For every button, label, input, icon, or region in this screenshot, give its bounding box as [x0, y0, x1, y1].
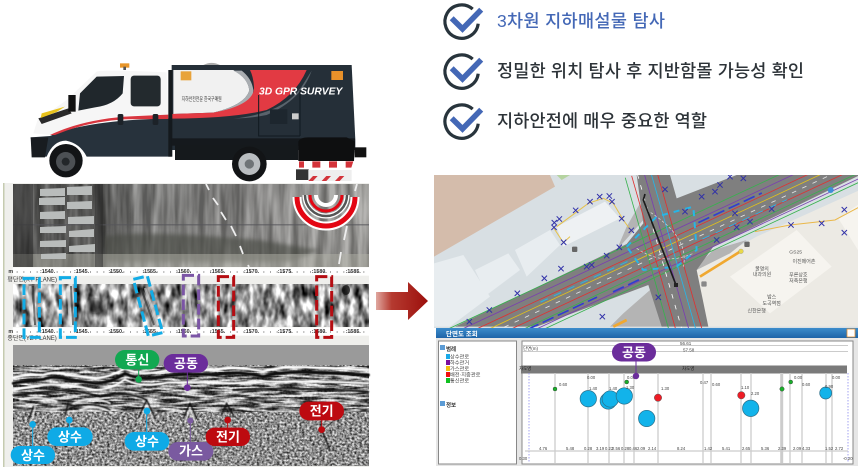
ruler: strip scale: :1580. [312, 329, 327, 335]
heading: precise location survey: 정밀한 위치 탐사 후 지반함몰 가능성 확인 [497, 61, 804, 81]
depth labels: 2.20 [751, 391, 760, 396]
depth labels: 0.47 [700, 380, 709, 385]
depth labels: 5.41 [722, 446, 731, 451]
ruler: strip scale: :1540. [40, 329, 56, 335]
ruler: strip scale: :1560. [176, 329, 192, 335]
depth labels: 0.00 [587, 375, 596, 380]
map POI labels: 저축은행 [789, 278, 808, 285]
panel: road surface image [13, 184, 369, 267]
heading: safety role: 지하안전에 매우 중요한 역할 [497, 111, 707, 131]
depth labels: 2.09 [637, 446, 646, 451]
callout: telecom [115, 350, 159, 383]
callout: telecom: 통신 [125, 352, 149, 367]
depth labels: 0.00 [794, 375, 803, 380]
callout: water pipe 1: 상수 [21, 448, 45, 463]
ruler: strip scale: :1575. [278, 329, 293, 335]
callout: water pipe 1 [11, 421, 55, 464]
callout: cavity on section: 공동 [622, 345, 646, 360]
depth labels: 2.65 [742, 446, 751, 451]
chart: GPR cross-section radargram [13, 345, 369, 466]
roads [610, 203, 747, 327]
survey section line [643, 194, 676, 285]
ruler: road image scale: :1550. [108, 269, 124, 275]
depth labels: 1.40 [609, 386, 618, 391]
utility lines along cross road [625, 169, 702, 338]
ruler: road image scale: :1575. [278, 269, 293, 275]
callout: water pipe 3: 상수 [135, 434, 159, 449]
depth labels: 0.60 [712, 382, 721, 387]
depth labels: 3.19 [596, 446, 605, 451]
ruler: road image scale: :1570. [244, 269, 260, 275]
callouts: radargram utility labels [11, 350, 344, 464]
pipe: water circles [580, 387, 832, 427]
map POI labels [747, 249, 816, 315]
depth labels: 5.36 [761, 446, 770, 451]
ruler: strip scale [7, 327, 369, 342]
panel: legend box: 배전·지중관로 [450, 370, 481, 378]
ruler: road image scale [7, 267, 369, 284]
ruler: road image scale: m [8, 269, 13, 275]
callout: electric 2 [299, 402, 344, 433]
map POI labels: 신한은행 [747, 308, 766, 315]
panel: legend box [438, 341, 516, 464]
depth labels: 4.33 [802, 446, 811, 451]
depth labels [519, 375, 853, 461]
depth labels: 2.39 [778, 446, 787, 451]
depth labels: 0.60 [802, 382, 811, 387]
depth labels: 2.56 [612, 446, 621, 451]
depth labels: 4.76 [539, 446, 548, 451]
callout: cavity [164, 354, 208, 391]
map POI labels: 푸른상호 [789, 271, 808, 278]
callout: gas: 가스 [179, 444, 203, 459]
annotations: dashed detection boxes [24, 275, 332, 337]
ruler: road image scale: :1555. [142, 269, 158, 275]
depth labels: 1.30 [626, 385, 635, 390]
depth labels: 0.22 [605, 446, 614, 451]
beige blocks [697, 190, 860, 327]
callout: cavity: 공동 [174, 356, 198, 371]
panel: legend box: 하수관거 [450, 358, 469, 366]
chart: pipe cross-section: 57.58 [683, 348, 695, 352]
ruler: road image scale: :1565. [210, 269, 226, 275]
window title bar [436, 328, 858, 338]
ruler: strip scale: :1550. [108, 329, 124, 335]
close button [847, 329, 855, 337]
ruler: strip scale: :1545. [74, 329, 90, 335]
depth labels: 0.00 [832, 375, 841, 380]
ruler: road image scale: 평단면(XY PLANE) [7, 276, 57, 284]
icon: check 3 [445, 105, 481, 138]
truck [31, 63, 366, 181]
depth labels: 0.90 [825, 384, 834, 389]
icon: radar half rings [297, 195, 355, 226]
depth labels: 2.09 [793, 446, 802, 451]
ruler: road image scale: :1585. [346, 269, 361, 275]
panel: utility map [434, 175, 858, 328]
depth labels: 0.28 [621, 446, 630, 451]
ruler: strip scale: :1570. [244, 329, 260, 335]
map POI labels: 밥스 [767, 294, 777, 301]
chart: pipe cross-section [519, 341, 853, 464]
map POI labels: 도곡역점 [762, 300, 781, 307]
pipe: telecom circles [553, 380, 793, 391]
panel: legend box: 범례 [446, 345, 456, 353]
ruler: strip scale: 종단면(YZ PLANE) [7, 334, 57, 342]
callout: water pipe 3 [125, 408, 169, 451]
depth labels: 5.48 [566, 446, 575, 451]
ruler: road image scale: :1560. [176, 269, 192, 275]
panel: legend box: 가스관로 [450, 364, 469, 372]
panel: legend box: 정보 [446, 401, 456, 409]
callout: electric 1: 전기 [216, 429, 240, 444]
pipe: electric circles [654, 392, 745, 401]
callout: cavity on section [612, 343, 656, 379]
panel: GPR left strip background [3, 183, 369, 467]
panel: legend box: 통신관로 [450, 376, 469, 384]
x markers [467, 174, 847, 324]
chart: pipe cross-section: 단면(m) [523, 345, 539, 351]
depth labels: 1.30 [661, 386, 670, 391]
ruler: strip scale: :1585. [346, 329, 361, 335]
depth labels: 0.30 [519, 456, 528, 461]
chart: pipe cross-section: 56.61 [680, 341, 692, 346]
ruler: strip scale: :1555. [142, 329, 158, 335]
map POI labels: 내과의원 [753, 271, 772, 278]
callout: water pipe 2: 상수 [58, 429, 82, 444]
callout: electric 1 [206, 417, 250, 446]
depth labels: 2.72 [835, 446, 844, 451]
ruler: road image scale: :1545. [74, 269, 90, 275]
depth labels: 0.28 [584, 446, 593, 451]
depth labels: 1.40 [589, 386, 598, 391]
chart: pipe cross-section: 차도영 [519, 365, 531, 372]
depth labels: 2.14 [648, 446, 657, 451]
ruler: strip scale: :1565. [210, 329, 226, 335]
ruler: strip scale: m [8, 329, 13, 335]
depth labels: 0.60 [559, 382, 568, 387]
panel: cross-section window [436, 328, 858, 466]
ruler: road image scale: :1580. [312, 269, 327, 275]
callout: water pipe 2 [47, 417, 93, 446]
depth labels: -0.20 [843, 456, 853, 461]
depth labels: 0.00 [627, 375, 636, 380]
chart: pipe cross-section: 차도영 [682, 365, 694, 372]
depth labels: 1.42 [704, 446, 713, 451]
ruler: road image scale: :1540. [40, 269, 56, 275]
depth labels: 1.10 [741, 385, 750, 390]
arrow: red block arrow [376, 282, 428, 320]
map POI labels: 이진메어촌 [793, 258, 816, 265]
callout: electric 2: 전기 [310, 403, 334, 418]
panel: legend box: 상수관로 [450, 352, 469, 360]
icon: check 2 [445, 55, 481, 88]
map POI labels: GS25 [789, 249, 802, 255]
depth labels: 0.46 [629, 446, 638, 451]
truck: 지하안전전문 한국구매원 [182, 95, 222, 103]
map POI labels: 꿀명의 [755, 265, 769, 272]
depth labels: 1.52 [825, 446, 834, 451]
window title: 단면도 조회 [446, 329, 478, 338]
utility lines along main road [450, 175, 858, 328]
heading: 3D underground survey: 3차원 지하매설물 탐사 [497, 11, 665, 31]
truck: 3D GPR SURVEY [259, 86, 344, 97]
icon: check 1 [445, 5, 481, 38]
depth labels: 8.24 [677, 446, 686, 451]
chart: GPR plan strip [13, 284, 369, 327]
callout: gas [168, 418, 213, 461]
